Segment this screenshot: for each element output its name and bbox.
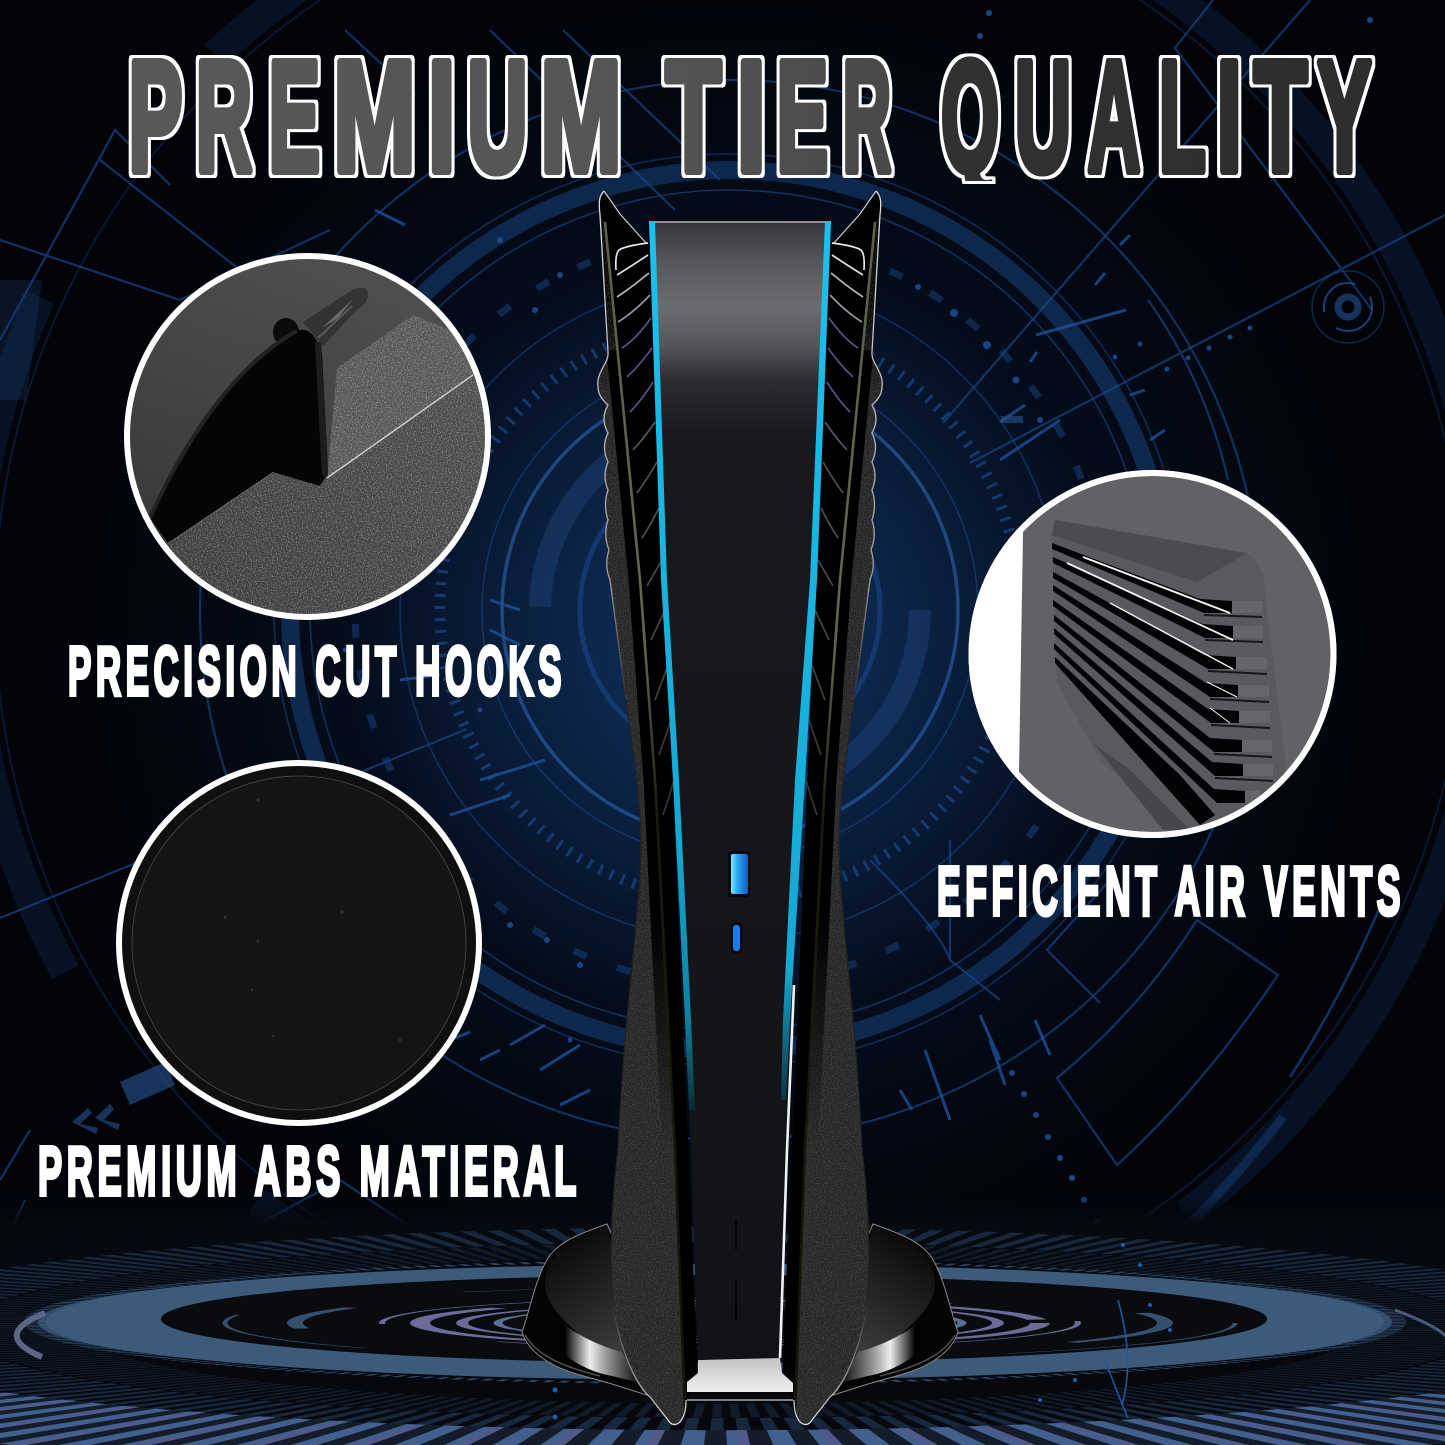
- label: precision cut hooks: PRECISION CUT HOOKS: [68, 632, 566, 710]
- hook fin: [150, 330, 328, 543]
- title: Y: [1318, 30, 1371, 204]
- title: I: [428, 30, 455, 204]
- title: E: [777, 30, 828, 204]
- title: L: [1159, 30, 1206, 204]
- label: premium ABS material: PREMIUM ABS MATIERAL: [38, 1132, 581, 1210]
- USB-C port: [731, 922, 742, 954]
- title: R: [196, 30, 252, 204]
- console: right half mirrored: [782, 191, 958, 1425]
- title: M: [333, 30, 416, 204]
- feature circle: efficient air vents photo: [968, 470, 1336, 838]
- radar target: [1312, 271, 1384, 343]
- title: I: [1217, 30, 1242, 204]
- feature circle: premium ABS material photo: [116, 760, 482, 1126]
- stand left side: [522, 1224, 650, 1396]
- title: M: [540, 30, 622, 204]
- title: T: [1254, 30, 1307, 204]
- title: U: [467, 30, 528, 204]
- feature circle: precision cut hooks photo: [120, 250, 500, 630]
- title: T: [666, 30, 721, 204]
- side shell: [598, 215, 686, 1425]
- title: E: [269, 30, 320, 204]
- louvres: [1052, 543, 1273, 825]
- data blocks and chevrons: [0, 280, 1023, 1134]
- floor pattern: [0, 1190, 1445, 1445]
- title: P: [129, 30, 182, 204]
- title: A: [1088, 30, 1140, 204]
- title: U: [1015, 30, 1071, 204]
- cyan light strip left: [649, 222, 695, 1110]
- title: I: [737, 30, 766, 204]
- USB port: [728, 851, 750, 897]
- title: Q: [941, 30, 999, 204]
- vents left: [616, 243, 674, 815]
- title: R: [843, 30, 891, 204]
- title: [128, 53, 1376, 184]
- hook pin: [273, 288, 368, 346]
- console: left half with stand, shell and vents: [522, 191, 698, 1425]
- console: centre panel: [649, 222, 831, 1400]
- cyan light strip right: [781, 222, 831, 1100]
